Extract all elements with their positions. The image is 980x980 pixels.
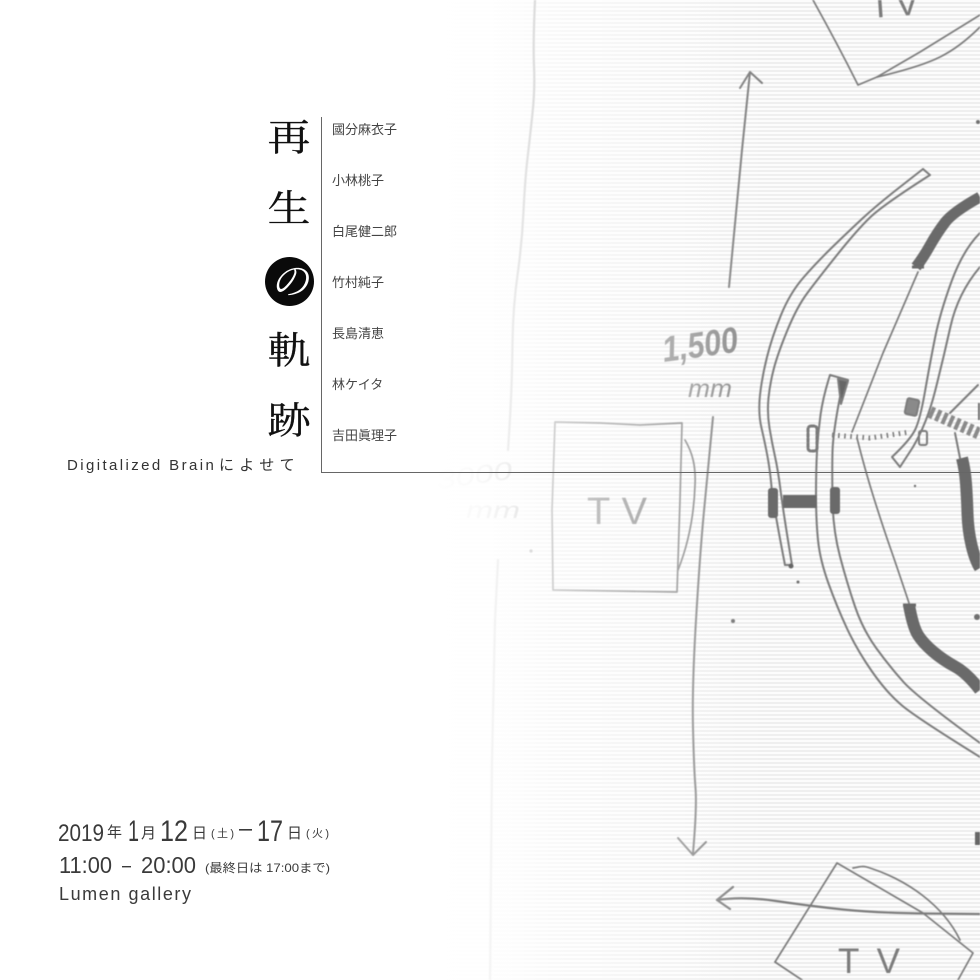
subtitle — [67, 457, 300, 474]
artist name list: 小林桃子 — [332, 172, 384, 188]
sketch: 3000 mm handwritten dimension: mm — [466, 497, 520, 523]
frame line: vertical and horizontal rule — [321, 117, 980, 473]
artist name list: 竹村純子 — [332, 274, 384, 290]
time line: (最終日は 17:00まで) — [205, 860, 330, 875]
title: vertical 再生の軌跡: 再 — [268, 118, 310, 159]
sketch: vertical dimension arrow with upward and downward heads — [678, 72, 762, 855]
sketch: stray pencil dots — [529, 120, 980, 623]
subtitle: Digitalized Brain — [67, 457, 216, 474]
artist name list: 國分麻衣子 — [332, 122, 397, 136]
sketch: top TV box — [813, 0, 980, 85]
event date, time and venue — [58, 815, 330, 904]
artist name list: 長島清恵 — [332, 326, 384, 340]
title: vertical 再生の軌跡: 生 — [268, 189, 310, 230]
date line: (土) — [211, 827, 234, 840]
sketch: left TV box — [552, 422, 695, 592]
sketch: 3000 mm handwritten dimension: 3000 — [435, 457, 514, 495]
date line: 12 — [160, 815, 188, 848]
sketch: left TV box: TV — [587, 491, 648, 533]
sketch: outer curved strip — [759, 169, 930, 568]
sketch: thick dark wall strokes — [768, 197, 980, 690]
date line: (火) — [306, 828, 329, 840]
time line — [59, 852, 330, 878]
title: vertical 再生の軌跡: 跡 — [268, 401, 310, 442]
date line: 日 — [192, 825, 207, 842]
artist name list — [332, 122, 397, 442]
artist name list: 林ケイタ — [332, 376, 383, 392]
date line — [58, 815, 329, 848]
title: vertical 再生の軌跡: 軌 — [268, 331, 310, 372]
artist name list: 吉田眞理子 — [332, 428, 397, 442]
time line: 20:00 — [141, 852, 196, 878]
sketch: far left wall line — [490, 0, 535, 980]
sketch: 1,500 mm handwritten dimension: mm — [688, 375, 732, 403]
date line: 2019 — [58, 820, 104, 847]
sketch: inner curved strip — [816, 375, 980, 757]
date line: 1 — [128, 815, 139, 848]
sketch: hatched lines and rope — [808, 412, 980, 451]
time line: 11:00 — [59, 852, 112, 878]
artist name list: 白尾健二郎 — [332, 224, 397, 238]
date line: 17 — [257, 815, 283, 848]
date line: 年 — [107, 824, 122, 841]
venue: Lumen gallery — [59, 884, 191, 904]
date line: 月 — [141, 825, 156, 842]
sketch: 3000 mm handwritten dimension — [435, 457, 520, 523]
sketch: 1,500 mm handwritten dimension: 1,500 — [659, 319, 740, 370]
sketch: bottom TV box with arrow — [717, 832, 980, 980]
sketch: thin connecting lines — [852, 272, 918, 603]
title: vertical 再生の軌跡 — [265, 118, 314, 442]
subtitle: によせて — [219, 457, 300, 474]
sketch: central strip — [892, 233, 980, 467]
sketch: bottom TV box with arrow: TV — [838, 942, 901, 980]
title: の in black circle — [265, 257, 314, 306]
title: の in black circle: の — [270, 261, 309, 304]
sketch: 1,500 mm handwritten dimension — [659, 319, 740, 403]
date line: 日 — [287, 825, 302, 842]
